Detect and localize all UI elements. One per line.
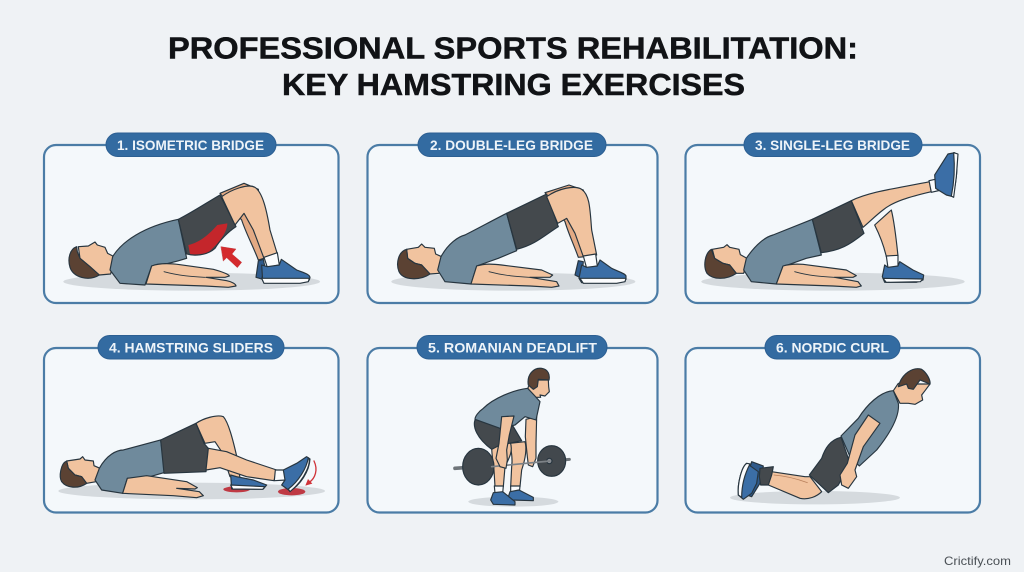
label: 5. romanian deadlift: 5. ROMANIAN DEADLIFT: [428, 340, 597, 356]
title: PROFESSIONAL SPORTS REHABILITATION:: [168, 32, 858, 66]
figure: romanian deadlift: [455, 368, 569, 507]
label: 6. nordic curl: [765, 336, 900, 359]
label: 4. hamstring sliders: [98, 336, 284, 359]
figure: single-leg bridge: [701, 153, 965, 291]
panel: nordic curl: [686, 336, 980, 512]
panel: single-leg bridge: [686, 133, 980, 303]
panel: double-leg bridge: [368, 133, 658, 303]
figure: double-leg bridge: [391, 185, 635, 291]
label: 5. romanian deadlift: [417, 336, 607, 359]
label: 1. isometric bridge: 1. ISOMETRIC BRIDGE: [117, 137, 264, 153]
title: KEY HAMSTRING EXERCISES: [282, 68, 745, 102]
label: 2. double-leg bridge: 2. DOUBLE-LEG BRIDGE: [430, 137, 593, 153]
panel: romanian deadlift: [368, 336, 658, 512]
title: [168, 32, 858, 102]
label: 3. single-leg bridge: [744, 133, 922, 156]
watermark: Crictify.com: [944, 554, 1011, 568]
panel: hamstring sliders: [44, 336, 338, 512]
label: 6. nordic curl: 6. NORDIC CURL: [776, 340, 889, 356]
figure: hamstring sliders: [58, 416, 325, 499]
figure: nordic curl: [730, 369, 930, 504]
label: 4. hamstring sliders: 4. HAMSTRING SLIDERS: [109, 340, 273, 356]
figure: isometric bridge with highlighted hamstring: [63, 183, 320, 291]
label: 1. isometric bridge: [106, 133, 276, 156]
panel: isometric bridge: [44, 133, 338, 303]
label: 2. double-leg bridge: [418, 133, 606, 156]
label: 3. single-leg bridge: 3. SINGLE-LEG BRIDGE: [755, 137, 910, 153]
